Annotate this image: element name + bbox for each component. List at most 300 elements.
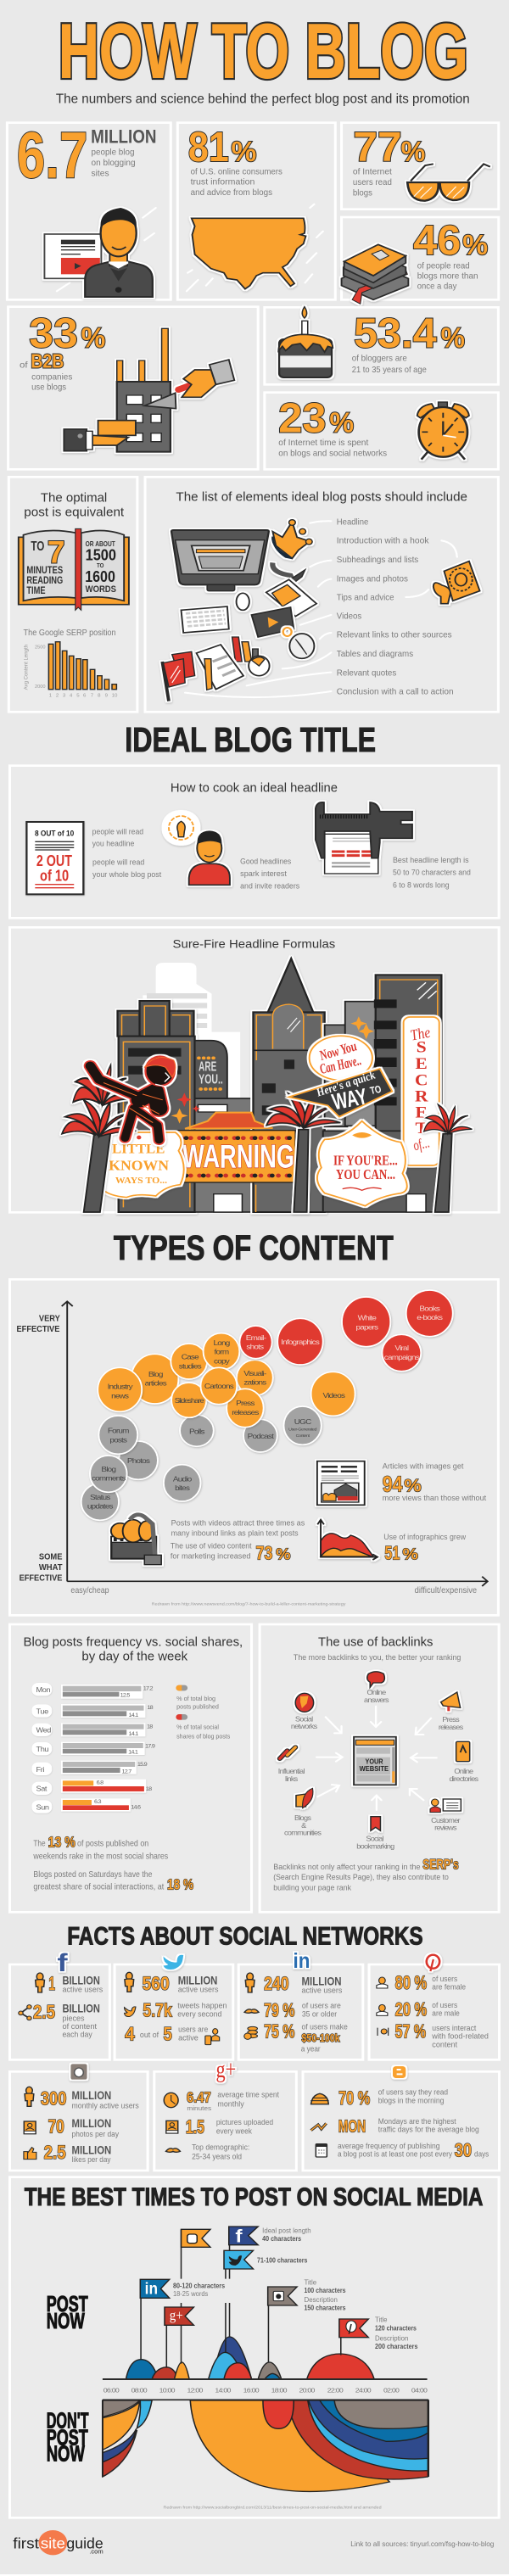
chart legend: shares of blog posts xyxy=(176,1733,230,1740)
palm: middle xyxy=(266,1093,340,1212)
flag: Facebook: 40 characters xyxy=(262,2235,301,2243)
label: post now xyxy=(47,2292,88,2333)
text: spark interest: spark interest xyxy=(240,870,287,879)
Pinterest stats: with food-related xyxy=(431,2032,489,2041)
icon: open book with reading time xyxy=(19,528,129,610)
bubbles: low effectiveness: Polls xyxy=(189,1428,205,1436)
stat: 23 percent: 23 xyxy=(278,395,327,441)
chart legend: % of total social xyxy=(176,1724,219,1731)
chart: Google SERP position: 8 xyxy=(98,694,101,699)
stat: 77 percent: of Internet xyxy=(353,167,392,176)
panel: Google+ xyxy=(154,2056,296,2171)
text: length guidance: Best headline length is xyxy=(393,857,469,865)
Instagram stats: 2.5 xyxy=(44,2143,66,2164)
icon: video player xyxy=(252,607,294,637)
stat: 53.4 percent: of bloggers are xyxy=(352,354,407,363)
bubbles: medium effectiveness: zations xyxy=(243,1378,267,1387)
sign: if you're you can xyxy=(317,1121,407,1206)
chart: good times humps xyxy=(126,2337,374,2379)
Pinterest stats: 57 % xyxy=(395,2022,426,2042)
bubbles: low effectiveness: bites xyxy=(175,1484,190,1492)
time axis: 18:00 xyxy=(271,2387,288,2394)
chart: bars by day: 15.9 xyxy=(137,1762,148,1768)
Facebook stats xyxy=(19,1973,103,2039)
label: post now: NOW xyxy=(47,2309,85,2333)
Facebook stats: 2.5 xyxy=(33,2003,55,2023)
flag: LinkedIn: 18-25 words xyxy=(173,2290,208,2298)
stat: use of infographics xyxy=(317,1520,467,1564)
Twitter stats xyxy=(125,1972,227,2045)
chart axes: EFFECTIVE xyxy=(20,1573,62,1583)
Blogger stats: blogs in the morning xyxy=(378,2097,444,2105)
bubbles: low effectiveness: Forum xyxy=(108,1427,130,1434)
chart legend: % of total blog xyxy=(176,1695,215,1702)
Twitter stats: active users xyxy=(178,1986,219,1994)
stat: 6.7 million: sites xyxy=(92,169,109,178)
stat: 77 percent: blogs xyxy=(353,188,372,198)
panel heading: How to cook an ideal headline xyxy=(171,781,338,795)
sign: if you're you can: YOU CAN... xyxy=(336,1166,395,1182)
Instagram stats: monthly active users xyxy=(72,2102,139,2110)
stat: posts with videos: The use of video content xyxy=(171,1542,252,1551)
stat: 6.7 million: MILLION xyxy=(91,127,156,148)
stat: 6.7 million: 6.7 xyxy=(17,119,87,192)
icon: 8 of 10 document: 2 OUT xyxy=(36,852,72,870)
stat: posts with videos: Posts with videos attract three times as xyxy=(171,1519,305,1528)
sign: little known ways to: KNOWN xyxy=(109,1157,169,1173)
text: readers: your whole blog post xyxy=(92,871,161,880)
chart: bars by day: 12.7 xyxy=(121,1769,132,1775)
source: press releases xyxy=(439,1692,463,1731)
Google+ stats: 25-34 years old xyxy=(192,2153,242,2161)
text: weekend findings xyxy=(33,1834,193,1893)
Pinterest stats: users interact xyxy=(432,2025,477,2033)
time axis: 04:00 xyxy=(411,2387,428,2394)
chart axes: EFFECTIVE xyxy=(17,1325,59,1334)
Google+ stats: 6.47 xyxy=(187,2089,211,2105)
source: online answers: Online xyxy=(367,1689,386,1696)
Facebook stats: BILLION xyxy=(62,2003,100,2015)
source credit: Redrawn from http://www.newsvend.com/blog/7-how-to-build-a-killer-content-marketing-strategy xyxy=(152,1602,346,1607)
chart axes: difficult/expensive xyxy=(415,1586,477,1595)
text: weekend findings: 18 % xyxy=(167,1876,193,1893)
chart: bars by day: 17.9 xyxy=(145,1744,155,1749)
palm: right xyxy=(424,1104,473,1212)
icon: monitor xyxy=(171,530,269,591)
stat: 33 percent of B2B: use blogs xyxy=(31,383,66,392)
chart: Google SERP position: 2 xyxy=(56,694,59,699)
stat: 23 percent xyxy=(278,395,387,458)
bubbles: low effectiveness: Content xyxy=(296,1433,310,1439)
chart: bars by day: 18 xyxy=(146,1786,152,1792)
source: influential links: links xyxy=(285,1775,298,1783)
chart: bars by day: Tue xyxy=(36,1707,48,1715)
building left xyxy=(118,1001,195,1212)
chart: bars by day xyxy=(31,1683,155,1813)
bubbles: medium effectiveness: Press xyxy=(236,1400,255,1407)
chart legend xyxy=(176,1685,230,1740)
Google+ stats: average time spent xyxy=(217,2091,279,2099)
element list: Subheadings and lists xyxy=(337,556,418,565)
background white tower xyxy=(143,963,240,1100)
panel: Pinterest xyxy=(369,1955,500,2059)
panel: Blogger xyxy=(303,2066,500,2171)
chart: Google SERP position: 2500 xyxy=(35,645,46,650)
bubbles: medium effectiveness: form xyxy=(215,1348,229,1356)
building lower centre xyxy=(195,1098,253,1212)
flag: Instagram: Description xyxy=(305,2296,338,2304)
icon: LinkedIn: in xyxy=(294,1948,310,1973)
sign: the secret of: T xyxy=(416,1120,428,1137)
sign: here's a quick way to xyxy=(289,1069,392,1117)
Facebook stats: active users xyxy=(62,1986,103,1994)
panel heading: The use of backlinks xyxy=(318,1636,433,1649)
stat: 46 percent: blogs more than xyxy=(417,271,478,281)
stars xyxy=(171,1016,421,1124)
Twitter stats: users are xyxy=(178,2026,209,2034)
chart: bars by day: 14.1 xyxy=(128,1750,138,1756)
stat: articles with images: Articles with images get xyxy=(383,1462,464,1471)
stat: articles with images: 94 xyxy=(383,1472,403,1496)
panel: 6.7 million bloggers xyxy=(7,119,171,299)
bubbles: low effectiveness: Audio xyxy=(173,1475,192,1483)
stat: 81 percent: trust information xyxy=(191,177,255,187)
panel heading: Blog posts frequency vs. social shares, xyxy=(24,1636,243,1649)
panel: 77 percent xyxy=(342,123,499,210)
Pinterest stats: of users xyxy=(432,2002,457,2010)
Google+ stats: 1.5 xyxy=(186,2117,204,2138)
Blogger stats: Mondays are the highest xyxy=(378,2118,456,2126)
bubbles: high effectiveness: Email- xyxy=(246,1334,266,1342)
stat: 33 percent of B2B: companies xyxy=(31,372,72,382)
chart: bad times bands xyxy=(103,2400,428,2491)
LinkedIn stats: MILLION xyxy=(301,1975,342,1988)
flag: Instagram: 150 characters xyxy=(305,2304,346,2311)
panel heading: Sure-Fire Headline Formulas xyxy=(173,938,335,951)
text: backlinks explanation: Backlinks not only affect your ranking in the xyxy=(273,1864,421,1872)
text: spark interest: Good headlines xyxy=(240,858,291,866)
building right xyxy=(325,975,441,1132)
time axis xyxy=(103,2379,428,2394)
stat: 53.4 percent xyxy=(352,310,465,375)
sign: the secret of: C xyxy=(415,1072,428,1089)
source: blogs and communities xyxy=(284,1788,322,1837)
Blogger stats: 30 xyxy=(455,2141,472,2161)
Twitter stats: every second xyxy=(177,2010,221,2019)
chart: Google SERP position: Avg Content Length xyxy=(24,645,30,690)
bubbles: low effectiveness: Photos xyxy=(127,1457,150,1465)
icon: open book with reading time: 1500 xyxy=(86,547,116,564)
panel heading: by day of the week xyxy=(81,1651,187,1663)
stat: 77 percent: 77 xyxy=(353,124,402,170)
chart axes: WHAT xyxy=(39,1563,63,1573)
Twitter stats: 4 xyxy=(125,2025,136,2045)
stat: 23 percent: of Internet time is spent xyxy=(278,439,368,448)
text: backlinks explanation: (Search Engine Results Page), they also contribute to xyxy=(273,1874,449,1882)
stat: 53.4 percent: 53.4 xyxy=(354,310,437,356)
Blogger stats: traffic days for the average blog xyxy=(378,2126,479,2134)
LinkedIn stats: 35 or older xyxy=(302,2010,338,2019)
source: press releases: releases xyxy=(439,1724,463,1731)
Twitter stats: MILLION xyxy=(178,1974,217,1987)
sign: little known ways to xyxy=(100,1132,184,1198)
chart: bars by day: 18 xyxy=(147,1724,153,1730)
LinkedIn stats: of users make xyxy=(301,2023,348,2031)
stat: use of infographics: % xyxy=(402,1546,418,1563)
chart: bars by day: Mon xyxy=(36,1686,51,1694)
time axis: 12:00 xyxy=(187,2387,204,2394)
flag: Pinterest: Title xyxy=(375,2316,388,2324)
icon: caliper measuring headline xyxy=(316,802,412,874)
section heading: IDEAL BLOG TITLE xyxy=(125,721,376,759)
source: online answers: answers xyxy=(364,1696,389,1704)
text: length guidance xyxy=(393,857,471,890)
icon: glasses xyxy=(407,164,490,201)
chart axes: SOME xyxy=(39,1552,62,1562)
LinkedIn stats: a year xyxy=(301,2045,321,2054)
stat: 46 percent: of people read xyxy=(417,261,470,271)
Pinterest stats: content xyxy=(432,2041,457,2049)
section: facts about social networks xyxy=(9,1921,500,2171)
source: online directories xyxy=(449,1741,478,1783)
Google+ stats: every week xyxy=(216,2127,253,2136)
flag: Instagram: Title xyxy=(305,2278,316,2286)
bubbles: medium effectiveness: Blog xyxy=(148,1371,163,1378)
icon: stack of books xyxy=(342,244,408,304)
label: post now: POST xyxy=(47,2292,88,2316)
element list: Images and photos xyxy=(337,574,408,584)
time axis: 02:00 xyxy=(383,2387,400,2394)
bubbles: high effectiveness: papers xyxy=(356,1323,378,1332)
time axis: 06:00 xyxy=(103,2387,120,2394)
Facebook stats: each day xyxy=(62,2031,92,2039)
chart: bars by day: 14.1 xyxy=(129,1713,139,1718)
icon: your website: YOUR xyxy=(365,1757,383,1765)
chart legend: posts published xyxy=(176,1703,219,1711)
chart: bars by day: 6.8 xyxy=(97,1780,103,1785)
stat: posts with videos: 73 xyxy=(256,1544,272,1564)
panel: posting frequency xyxy=(9,1624,252,1912)
stat: 23 percent: on blogs and social networks xyxy=(278,449,387,458)
Instagram stats: 300 xyxy=(41,2089,66,2109)
flag: Google+: g+ xyxy=(170,2307,183,2323)
text: spark interest xyxy=(240,858,299,891)
element list: Videos xyxy=(337,612,361,621)
stat: posts with videos xyxy=(111,1515,305,1565)
text: weekend findings: 13 % xyxy=(48,1834,76,1851)
flag poles xyxy=(141,2227,341,2368)
panel heading: The more backlinks to you, the better your ranking xyxy=(294,1654,461,1662)
source: influential links xyxy=(278,1747,305,1783)
sign: the secret of: E xyxy=(416,1055,428,1073)
Facebook stats: 1 xyxy=(48,1974,55,1995)
icon: mouse and keyboard xyxy=(182,593,249,633)
icon: 8 of 10 document: 8 OUT of 10 xyxy=(35,830,75,838)
stat: 77 percent: users read xyxy=(353,178,392,187)
logo: first site guide: guide xyxy=(66,2535,103,2552)
text: weekend findings: greatest share of social interactions, at xyxy=(33,1883,164,1891)
icon: photo xyxy=(266,579,316,617)
LinkedIn stats: $50-100k xyxy=(301,2032,340,2044)
stat: 81 percent: % xyxy=(231,136,256,167)
bubbles: low effectiveness: Status xyxy=(90,1494,111,1501)
panel: headline formulas xyxy=(9,927,499,1212)
chart axes xyxy=(17,1301,488,1595)
icon: Blogger xyxy=(393,2066,406,2078)
stat: 33 percent of B2B xyxy=(20,310,105,392)
element list xyxy=(337,517,454,696)
stat: posts with videos: many inbound links as plain text posts xyxy=(171,1529,299,1538)
source: online answers xyxy=(364,1672,389,1704)
LinkedIn stats xyxy=(244,1973,348,2054)
lower right base xyxy=(323,1131,448,1212)
stat: articles with images: more views than those without xyxy=(383,1495,486,1503)
icon: document and pencil xyxy=(197,645,243,690)
time axis: 14:00 xyxy=(215,2387,232,2394)
source: online directories: directories xyxy=(449,1775,478,1783)
red stars xyxy=(177,1092,200,1112)
flag: Instagram xyxy=(268,2278,346,2311)
bubbles: medium effectiveness: articles xyxy=(145,1379,167,1388)
panel: cook an ideal headline xyxy=(9,766,499,918)
source: social networks: networks xyxy=(291,1723,317,1730)
stat: 33 percent of B2B: of xyxy=(20,360,28,370)
section: best times to post xyxy=(0,2177,509,2576)
logo: first site guide xyxy=(13,2530,103,2556)
chart: bars by day: 14.1 xyxy=(129,1731,139,1737)
text: weekend findings: weekends rake in the most social shares xyxy=(33,1852,168,1861)
sign: are you: YOU.. xyxy=(199,1070,223,1087)
time axis: 10:00 xyxy=(159,2387,176,2394)
Blogger stats: 70 % xyxy=(338,2088,370,2109)
section: frequency and backlinks xyxy=(9,1624,499,1912)
LinkedIn stats: 75 % xyxy=(264,2022,294,2042)
flag: Pinterest xyxy=(339,2316,418,2350)
sign: here's a quick way to: WAY xyxy=(330,1084,370,1115)
icon: alarm clock xyxy=(417,402,469,460)
chart: bars by day: 6.3 xyxy=(94,1799,102,1805)
bubbles: low effectiveness: UGC xyxy=(294,1418,312,1426)
bubbles: low effectiveness: User-Generated xyxy=(288,1428,317,1433)
icon: open book with reading time: WORDS xyxy=(86,585,116,595)
bubbles: medium effectiveness: copy xyxy=(214,1357,230,1366)
Blogger stats: a blog post is at least one post every xyxy=(338,2150,452,2159)
stat: posts with videos: % xyxy=(276,1546,291,1563)
element list: Headline xyxy=(337,517,368,527)
Google+ stats: pictures uploaded xyxy=(216,2119,273,2127)
bubbles: low effectiveness: Blog xyxy=(101,1466,116,1473)
neon figure xyxy=(90,1056,176,1140)
sign: now you can have xyxy=(310,1036,372,1080)
stat: 53.4 percent: % xyxy=(441,322,465,354)
icon: open book with reading time: TO xyxy=(97,562,103,569)
source: press releases: Press xyxy=(442,1716,459,1724)
source: customer reviews: Customer xyxy=(431,1817,461,1824)
heading: optimal post: The optimal xyxy=(41,492,107,505)
icon: open book with reading time: TIME xyxy=(26,584,46,596)
Blogger stats xyxy=(310,2088,489,2161)
section: types of content xyxy=(9,1229,498,1615)
sign: here's a quick way to: TO xyxy=(369,1083,383,1097)
connector lines xyxy=(185,521,457,697)
chart: bars by day: Wed xyxy=(36,1726,52,1735)
flag: Google+ xyxy=(165,2307,193,2325)
chart: Google SERP position xyxy=(24,629,117,699)
header and first statistics row xyxy=(7,8,499,304)
bubbles: medium effectiveness: Visuali- xyxy=(243,1370,266,1377)
text: readers: you headline xyxy=(92,840,135,848)
Blogger stats: of users say they read xyxy=(378,2088,448,2097)
LinkedIn stats: active users xyxy=(301,1986,342,1995)
Blogger stats: days xyxy=(474,2150,489,2159)
chart: Google SERP position: 7 xyxy=(91,694,93,699)
sign: the secret of: R xyxy=(415,1088,428,1105)
Google+ stats: minutes xyxy=(187,2104,211,2112)
panel: Twitter xyxy=(115,1955,233,2059)
panel: 53.4 percent xyxy=(265,307,498,384)
icon: hook and idea xyxy=(433,562,480,604)
sign: the secret of: E xyxy=(416,1104,428,1121)
icon: thinking person xyxy=(163,812,230,885)
heading: optimal post: post is equivalent xyxy=(24,506,125,519)
stat: 46 percent: once a day xyxy=(417,282,457,291)
stat: 6.7 million: people blog xyxy=(92,148,134,157)
Twitter stats: 5 xyxy=(163,2025,172,2045)
flag: Facebook xyxy=(229,2226,311,2246)
text: readers xyxy=(92,828,161,880)
stat: 81 percent: of U.S. online consumers xyxy=(191,167,282,176)
element list: Tables and diagrams xyxy=(337,650,413,659)
panel: list of elements xyxy=(145,477,498,712)
Twitter stats: tweets happen xyxy=(177,2002,227,2010)
section: sure-fire headline formulas xyxy=(9,927,499,1212)
building centre with spire xyxy=(253,958,325,1212)
Instagram stats xyxy=(24,2087,139,2165)
chart: Google SERP position: 1 xyxy=(49,694,52,699)
bubbles: medium effectiveness: Videos xyxy=(323,1392,345,1400)
element list: Relevant links to other sources xyxy=(337,630,452,640)
chart: bars by day: Sun xyxy=(36,1803,49,1811)
bubbles: low effectiveness: Podcast xyxy=(248,1433,274,1440)
source: customer reviews: reviews xyxy=(434,1824,456,1832)
panel: B2B companies xyxy=(8,307,258,469)
panel: Facebook xyxy=(9,1948,109,2059)
Facebook stats: BILLION xyxy=(62,1974,100,1987)
flag: Pinterest: 120 characters xyxy=(375,2324,417,2332)
bubbles: medium effectiveness: Slideshare xyxy=(175,1397,204,1405)
source: blogs and communities: & xyxy=(301,1822,306,1830)
icon: open book with reading time: 1600 xyxy=(85,568,115,586)
sign: little known ways to: LITTLE xyxy=(112,1141,165,1156)
LinkedIn stats: of users are xyxy=(302,2002,341,2010)
icon: 8 of 10 document xyxy=(26,822,83,894)
chart: bars by day: Fri xyxy=(36,1766,45,1774)
panel: content chart xyxy=(9,1279,498,1615)
icon: Google+: g+ xyxy=(215,2056,236,2083)
chart: Google SERP position: 3 xyxy=(63,694,65,699)
statistics row two and post elements xyxy=(8,307,498,712)
stat: articles with images xyxy=(317,1461,486,1505)
stat: 33 percent of B2B: 33 xyxy=(29,310,78,356)
source: online directories: Online xyxy=(454,1768,473,1775)
chart: Google SERP position: 4 xyxy=(70,694,73,699)
Twitter stats: active xyxy=(178,2034,199,2042)
sign: are you xyxy=(195,1041,227,1112)
icon: Twitter bird xyxy=(163,1955,183,1970)
element list: Introduction with a hook xyxy=(337,536,429,545)
time axis: 20:00 xyxy=(299,2387,316,2394)
icon: open book with reading time: TO xyxy=(31,539,45,554)
